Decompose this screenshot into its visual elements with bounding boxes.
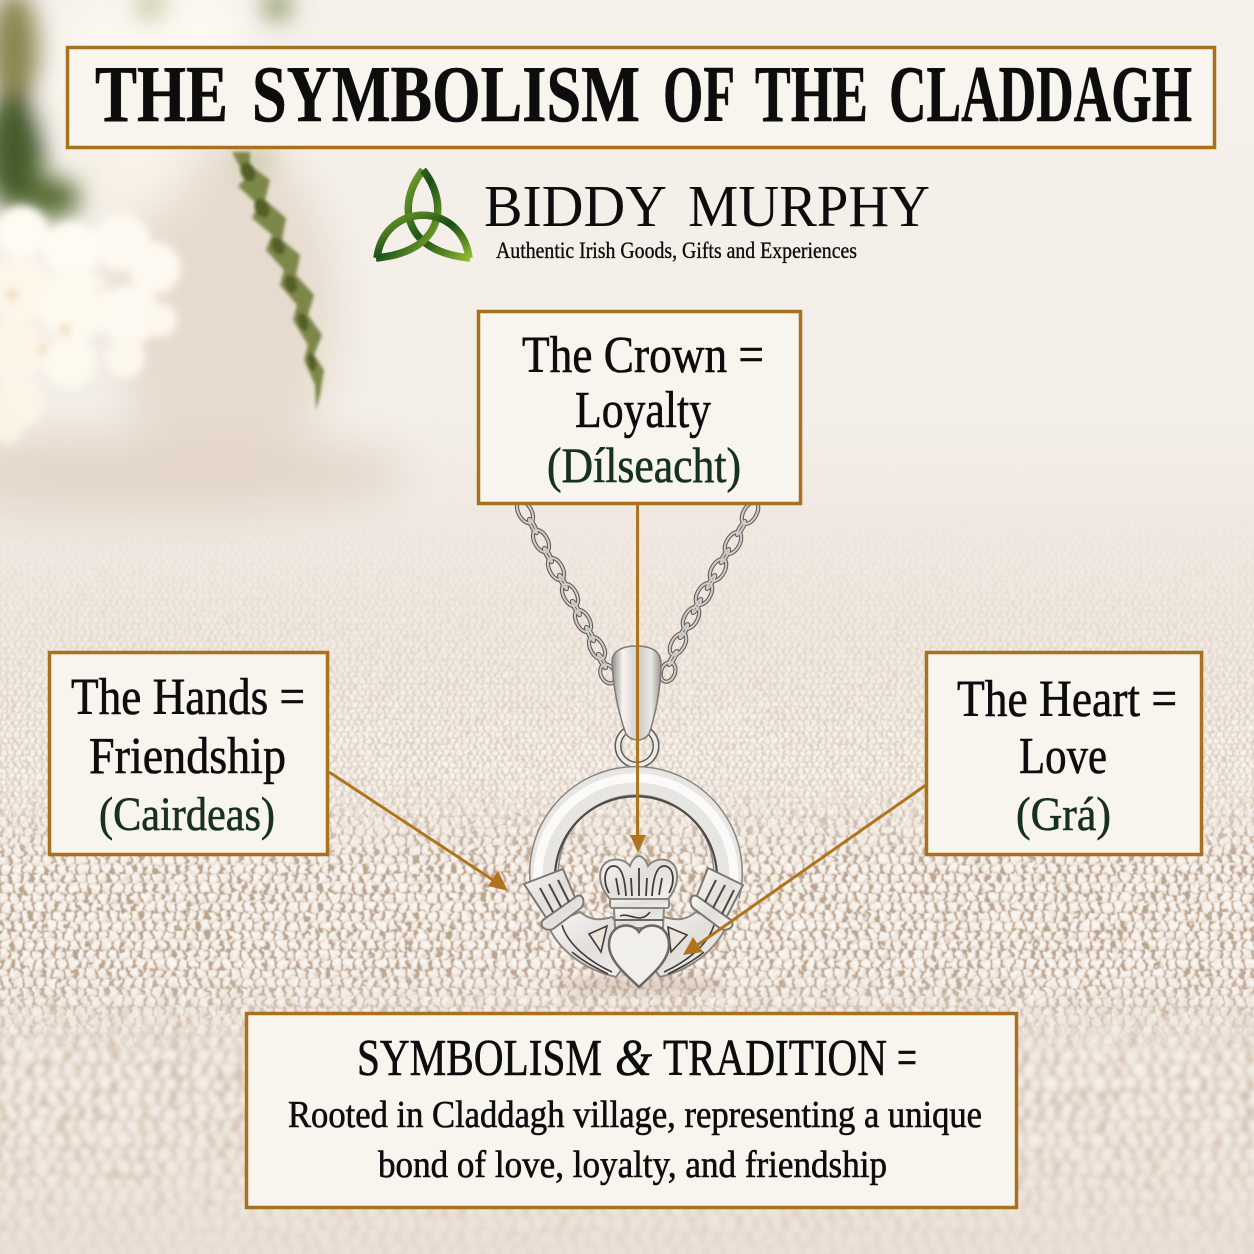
- hands meaning: Friendship: [89, 728, 286, 785]
- panel: the hands: [50, 652, 328, 854]
- pendant necklace: [514, 498, 762, 994]
- title text: SYMBOLISM: [252, 51, 640, 139]
- logo tagline: Authentic Irish Goods, Gifts and Experiences: [496, 238, 857, 263]
- heart: [609, 925, 669, 987]
- crown label: The Crown =: [522, 327, 764, 384]
- chain: [514, 498, 762, 686]
- left cuff: [524, 869, 584, 930]
- crown irish term: (Dílseacht): [547, 437, 741, 493]
- tradition heading: SYMBOLISM: [357, 1030, 602, 1087]
- title text: OF: [663, 51, 735, 139]
- left hand: [548, 912, 636, 977]
- bail: [612, 646, 661, 740]
- tradition body line one: Rooted in Claddagh village, representing a unique: [288, 1094, 982, 1136]
- right cuff: [690, 868, 743, 930]
- icon: hanging green sprig: [232, 152, 324, 410]
- panel: the heart: [926, 652, 1202, 854]
- arrow: hands panel to hands: [329, 772, 508, 891]
- ring: [538, 778, 734, 895]
- title text: THE: [755, 51, 868, 139]
- panel: the crown: [478, 312, 800, 504]
- jump ring: [618, 727, 656, 765]
- background: blurred flowers and greenery: [0, 0, 410, 515]
- hands irish term: (Cairdeas): [99, 788, 275, 841]
- logo wordmark: MURPHY: [688, 173, 930, 239]
- panel: symbolism and tradition: [246, 1014, 1016, 1208]
- logo wordmark: [484, 173, 930, 239]
- crown: [600, 856, 677, 928]
- icon: green trinity knot: [376, 170, 470, 258]
- arrow: heart panel to heart: [683, 785, 926, 955]
- heart label: The Heart =: [957, 671, 1177, 728]
- heart meaning: Love: [1019, 728, 1107, 785]
- tradition heading: [357, 1030, 917, 1087]
- title text: THE: [95, 51, 228, 139]
- heart irish term: (Grá): [1016, 788, 1111, 841]
- tradition heading: TRADITION: [663, 1030, 887, 1087]
- logo wordmark: BIDDY: [484, 173, 667, 239]
- tradition heading: =: [897, 1030, 917, 1087]
- triangle gaps between fingers: [589, 926, 607, 952]
- tradition heading: &: [615, 1030, 653, 1087]
- tradition body line two: bond of love, loyalty, and friendship: [378, 1144, 887, 1186]
- crown meaning: Loyalty: [575, 382, 711, 439]
- hands label: The Hands =: [71, 669, 305, 726]
- title panel: [68, 48, 1214, 148]
- logo: Biddy Murphy: [376, 170, 930, 263]
- title text: [95, 51, 1192, 139]
- right hand: [640, 912, 727, 977]
- arrow: crown panel to crown: [630, 504, 646, 853]
